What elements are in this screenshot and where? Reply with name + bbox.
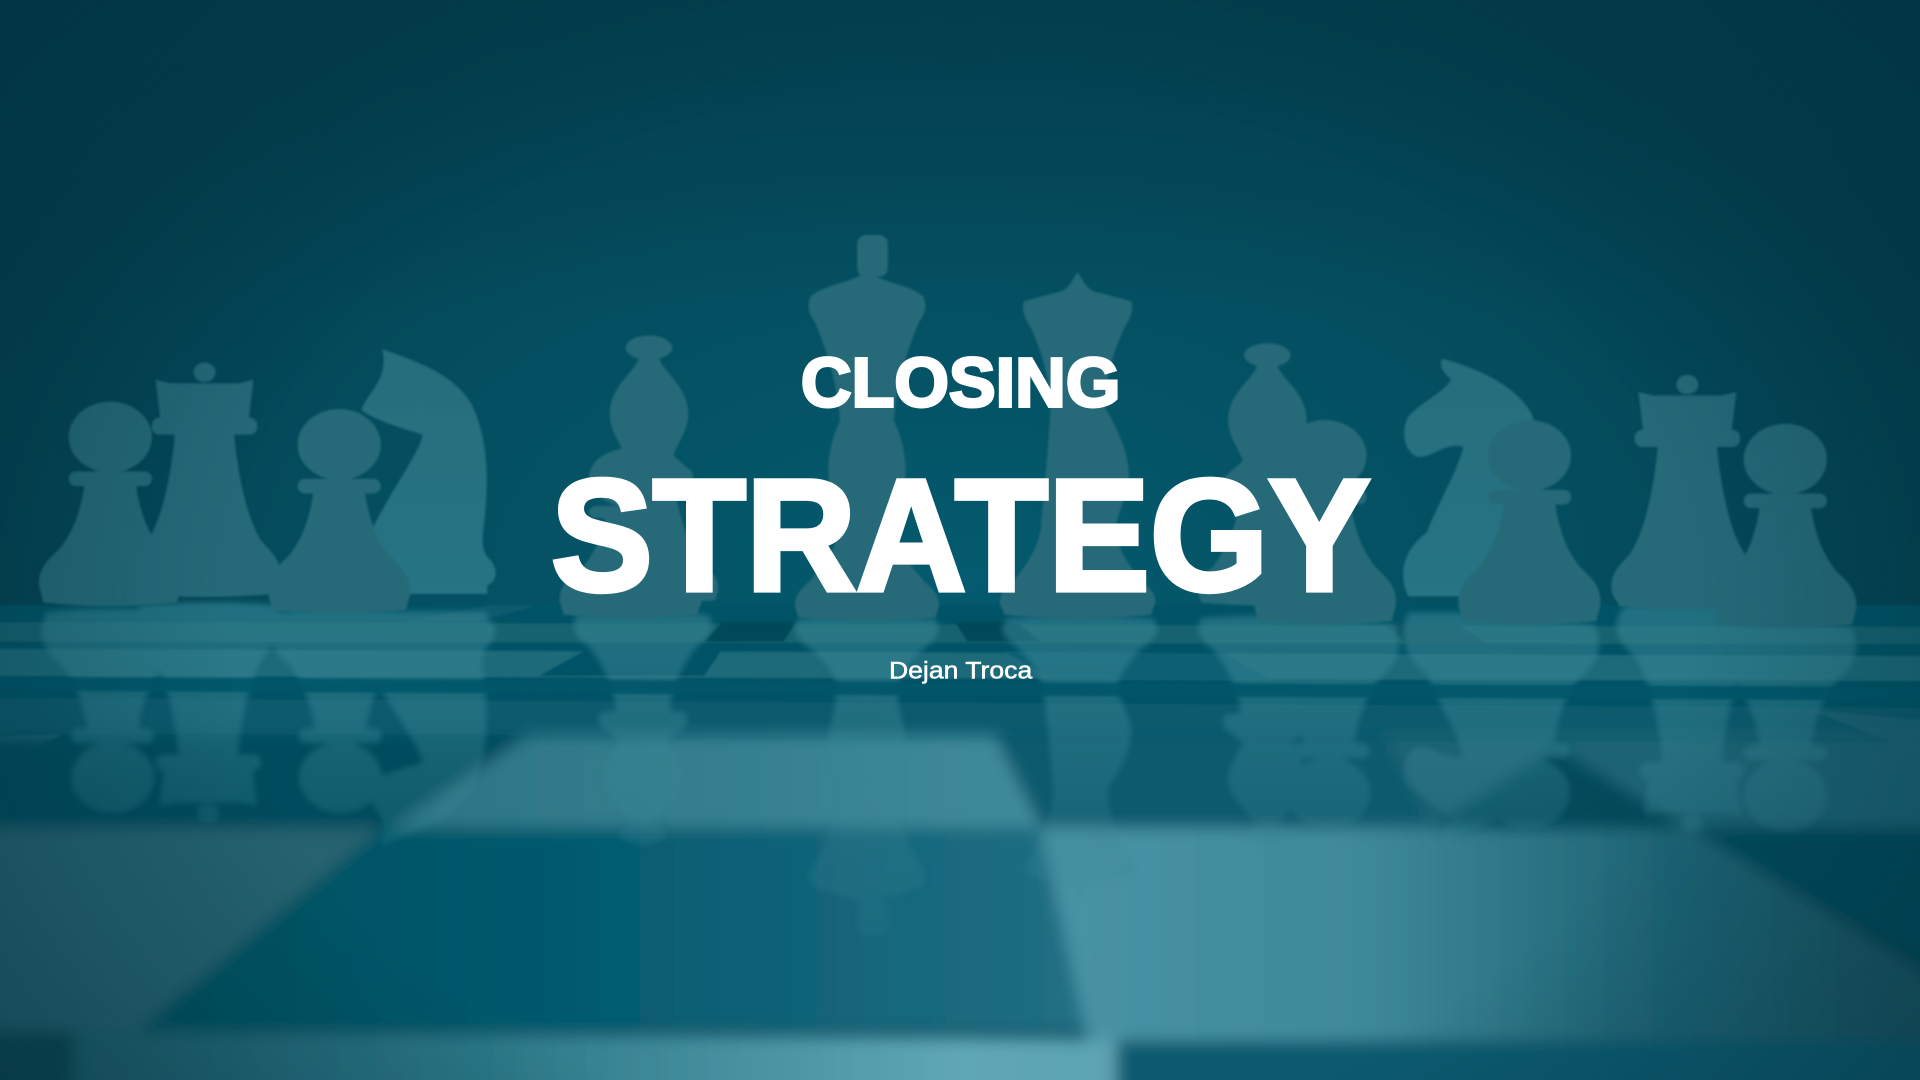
piece reflections [42, 600, 1857, 884]
dark floor band across reflections [0, 677, 1920, 700]
dark far-right square [1690, 828, 1920, 980]
piece: queen [1000, 272, 1155, 618]
bright bottom square [73, 1031, 1117, 1080]
piece: left pawn 2 [268, 409, 410, 613]
light left square [0, 828, 382, 1031]
piece: right bishop [1198, 343, 1337, 605]
dark centre-right row [994, 735, 1433, 828]
dark bottom-left corner [0, 1031, 73, 1080]
piece: right knight [1403, 359, 1533, 596]
top shading [0, 0, 1920, 318]
piece: left rook-queen [129, 362, 280, 597]
dark bottom-right square [1117, 1041, 1920, 1080]
title: CLOSING: CLOSING [801, 344, 1120, 422]
piece: centre-left pawn [560, 448, 702, 618]
light centre row [392, 735, 1041, 828]
piece: right centre pawn [1254, 420, 1396, 624]
lower board squares [0, 735, 1920, 1080]
far board rows [0, 605, 1920, 778]
piece: right rook-queen [1611, 375, 1763, 609]
author name: Dejan Troca [889, 657, 1033, 684]
piece: right pawn 2 [1714, 424, 1856, 628]
piece: king [795, 235, 939, 621]
chessboard floor [0, 605, 1920, 778]
piece: left knight [361, 349, 496, 594]
chess pieces [39, 235, 1856, 628]
light right square [1041, 828, 1920, 1041]
dark left row [0, 737, 527, 828]
title: STRATEGY: STRATEGY [551, 446, 1370, 624]
piece: left bishop [580, 336, 718, 603]
piece: left pawn 1 [39, 402, 181, 606]
dark centre square [137, 828, 1087, 1031]
light right row [1384, 735, 1920, 828]
piece: right pawn 1 [1458, 420, 1600, 624]
